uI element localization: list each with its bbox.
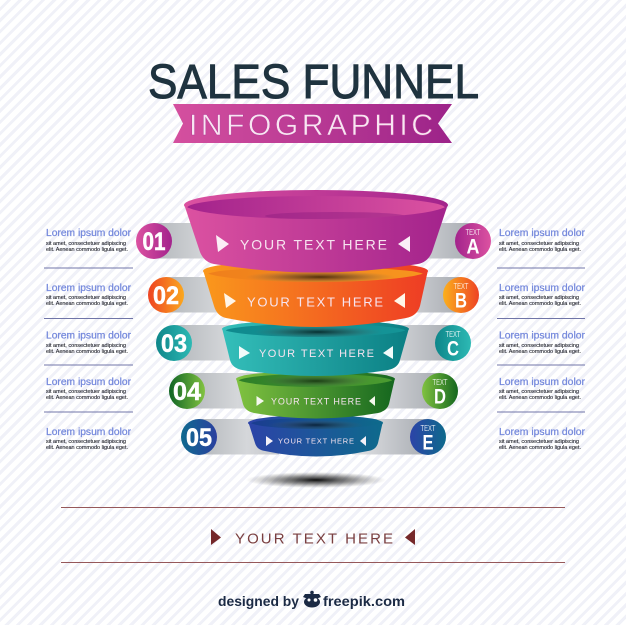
- left text 5: sit amet, consectetuer adipiscing: [46, 439, 126, 445]
- left text 5: elit. Aenean commodo ligula eget.: [46, 445, 128, 451]
- left text 5: Lorem ipsum dolor: [46, 426, 131, 438]
- badge E: TEXT: [420, 424, 436, 433]
- badge 01: 01: [142, 228, 166, 256]
- badge 04: 04: [173, 378, 201, 406]
- title: SALES FUNNEL: [148, 56, 479, 109]
- right text 4: [499, 376, 585, 401]
- panel: right text column: [499, 227, 585, 451]
- left text 1: sit amet, consectetuer adipiscing: [46, 241, 126, 247]
- funnel layer 4: green: [236, 371, 395, 418]
- funnel layer 3: teal: YOUR TEXT HERE: [259, 348, 374, 360]
- right text 3: elit. Aenean commodo ligula eget.: [499, 349, 581, 355]
- funnel layer 3: teal: [222, 320, 409, 376]
- left text 3: Lorem ipsum dolor: [46, 330, 131, 342]
- right text 1: Lorem ipsum dolor: [499, 227, 585, 239]
- right text 1: [499, 227, 585, 253]
- right text 1: elit. Aenean commodo ligula eget.: [499, 247, 581, 253]
- badge 02: [148, 277, 184, 313]
- right text 2: Lorem ipsum dolor: [499, 282, 585, 294]
- badge 04: [169, 373, 205, 409]
- right text 3: sit amet, consectetuer adipiscing: [499, 343, 579, 349]
- left text 4: Lorem ipsum dolor: [46, 376, 131, 388]
- badge B: B: [455, 290, 467, 312]
- left text 3: [46, 330, 131, 355]
- right text 2: sit amet, consectetuer adipiscing: [499, 295, 579, 301]
- left text 3: elit. Aenean commodo ligula eget.: [46, 349, 128, 355]
- left text 4: elit. Aenean commodo ligula eget.: [46, 395, 128, 401]
- left text 5: [46, 426, 131, 451]
- funnel layer 5: blue: [248, 415, 383, 456]
- footer credit: [218, 591, 405, 609]
- right text 3: [499, 330, 585, 355]
- left text 2: Lorem ipsum dolor: [46, 282, 131, 294]
- right text 5: [499, 426, 585, 451]
- callout: bottom text: YOUR TEXT HERE: [235, 530, 393, 548]
- left text 2: sit amet, consectetuer adipiscing: [46, 295, 126, 301]
- funnel layer 5: blue: YOUR TEXT HERE: [278, 437, 354, 446]
- badge D: [422, 373, 458, 409]
- funnel layer 2: orange: [203, 260, 428, 327]
- badge 03: 03: [161, 330, 187, 358]
- left text 4: sit amet, consectetuer adipiscing: [46, 389, 126, 395]
- badge D: D: [434, 386, 446, 408]
- funnel shadow: [246, 472, 386, 488]
- icon: freepik logo: [303, 591, 321, 608]
- right text 4: Lorem ipsum dolor: [499, 376, 585, 388]
- grey connector bars: [154, 223, 473, 454]
- badge B: TEXT: [454, 282, 469, 291]
- right text 4: elit. Aenean commodo ligula eget.: [499, 395, 581, 401]
- right text 5: sit amet, consectetuer adipiscing: [499, 439, 579, 445]
- badge 05: [181, 419, 217, 455]
- left text 4: [46, 376, 131, 401]
- left text 1: [46, 227, 131, 253]
- funnel layer 1: pink: [184, 190, 448, 272]
- ribbon: infographic: INFOGRAPHIC: [189, 109, 433, 142]
- right text 4: sit amet, consectetuer adipiscing: [499, 389, 579, 395]
- left text 1: elit. Aenean commodo ligula eget.: [46, 247, 128, 253]
- funnel: [184, 190, 448, 456]
- left text 3: sit amet, consectetuer adipiscing: [46, 343, 126, 349]
- badge 01: [136, 223, 172, 259]
- left text 2: elit. Aenean commodo ligula eget.: [46, 301, 128, 307]
- badge A: A: [466, 236, 480, 258]
- right text 1: sit amet, consectetuer adipiscing: [499, 241, 579, 247]
- left text 2: [46, 282, 131, 307]
- badge 05: 05: [186, 424, 212, 452]
- right text 2: [499, 282, 585, 307]
- badge 02: 02: [153, 282, 179, 310]
- badge C: C: [447, 338, 459, 360]
- funnel layer 1: pink: YOUR TEXT HERE: [240, 236, 387, 252]
- badge B: [443, 277, 479, 313]
- badge D: TEXT: [432, 378, 448, 387]
- badge A: [455, 223, 491, 259]
- funnel layer 4: green: YOUR TEXT HERE: [271, 396, 361, 406]
- badge E: [410, 419, 446, 455]
- right text 2: elit. Aenean commodo ligula eget.: [499, 301, 581, 307]
- badge C: TEXT: [446, 330, 461, 339]
- right text 5: elit. Aenean commodo ligula eget.: [499, 445, 581, 451]
- left text 1: Lorem ipsum dolor: [46, 227, 131, 239]
- callout: bottom text: [61, 508, 565, 562]
- footer credit: designed by: [218, 593, 299, 609]
- footer credit: freepik.com: [323, 593, 405, 609]
- badge E: E: [422, 432, 434, 454]
- badge A: TEXT: [466, 228, 481, 237]
- panel: left text column: [46, 227, 131, 451]
- right text 5: Lorem ipsum dolor: [499, 426, 585, 438]
- badge 03: [156, 325, 192, 361]
- right text 3: Lorem ipsum dolor: [499, 330, 585, 342]
- funnel layer 2: orange: YOUR TEXT HERE: [247, 294, 383, 310]
- badge C: [435, 325, 471, 361]
